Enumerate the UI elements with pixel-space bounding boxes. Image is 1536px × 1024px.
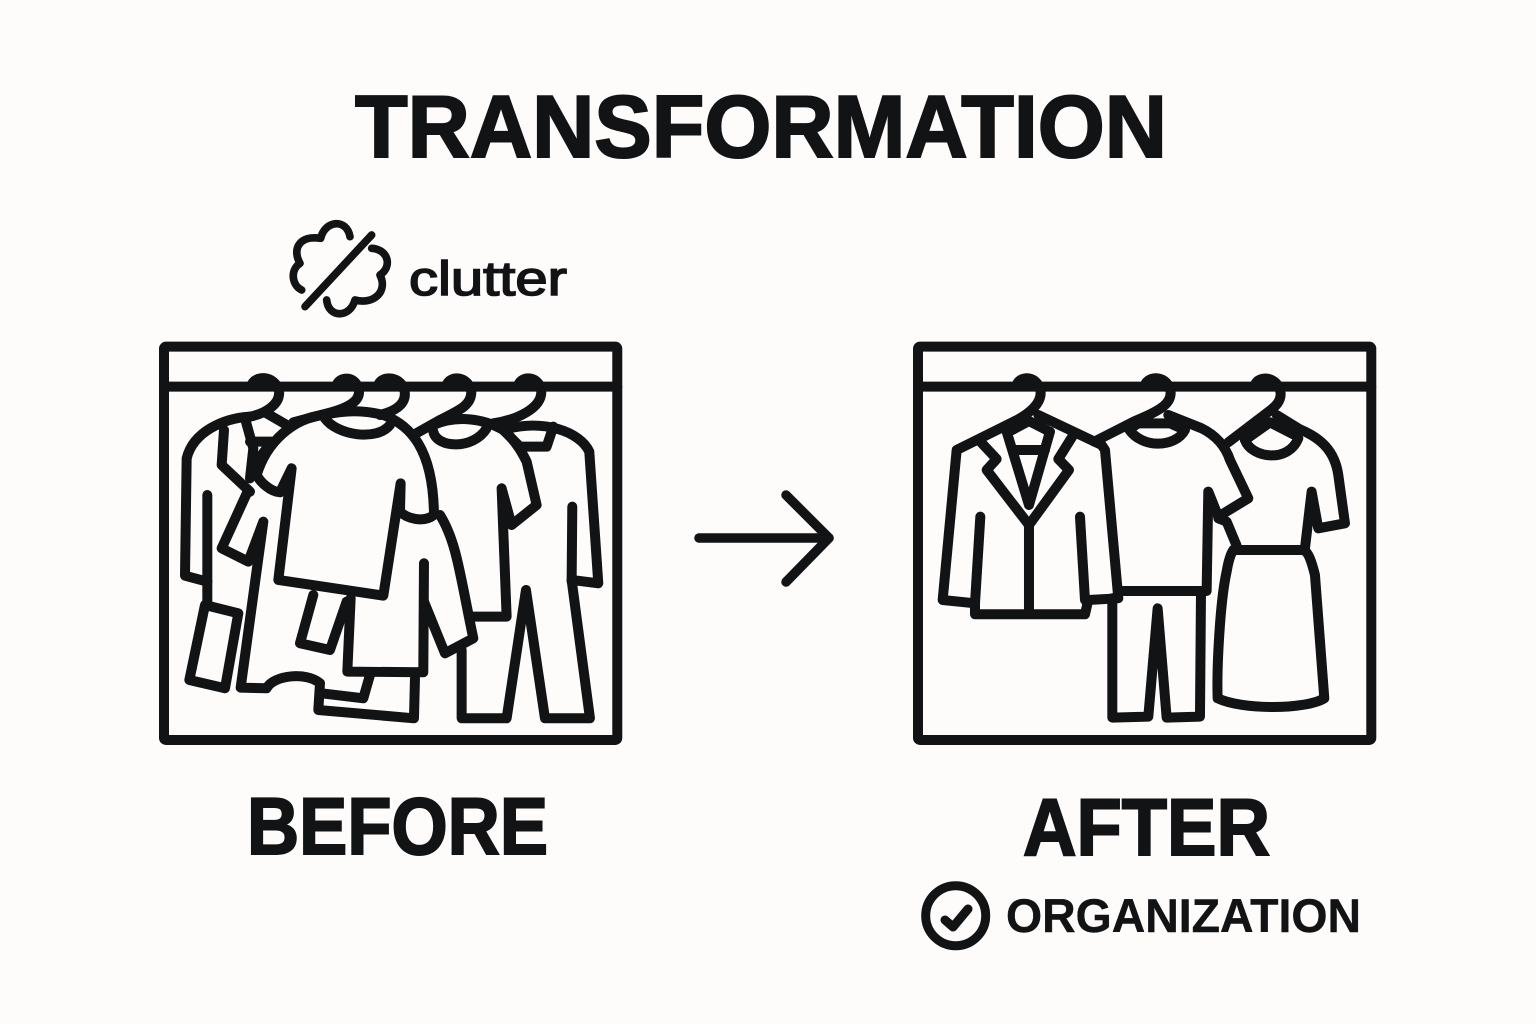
icon: crossed-out clutter cloud	[293, 224, 387, 314]
wardrobe frame and rail	[164, 347, 617, 740]
crumpled dress	[222, 490, 415, 718]
hangers	[250, 378, 541, 435]
t-shirt	[1118, 415, 1248, 591]
arrow	[699, 495, 829, 582]
suit jacket	[943, 415, 1118, 614]
panel: after wardrobe	[918, 347, 1371, 740]
title: TRANSFORMATION	[355, 77, 1167, 176]
back coat	[185, 413, 287, 688]
after label: AFTER	[1023, 783, 1270, 873]
icon: check mark in circle	[926, 886, 986, 946]
organization label: ORGANIZATION	[1006, 889, 1361, 942]
front t-shirt	[257, 411, 434, 596]
before label: BEFORE	[247, 782, 548, 872]
overlapping jacket sleeve	[300, 515, 473, 672]
trousers and back shirt	[462, 426, 598, 718]
dress	[1217, 415, 1345, 707]
clutter label: clutter	[409, 253, 567, 306]
panel: before wardrobe	[164, 347, 617, 740]
second t-shirt	[433, 419, 537, 617]
wardrobe frame and rail	[918, 347, 1371, 740]
trousers	[1112, 595, 1201, 718]
hangers	[1015, 378, 1281, 442]
